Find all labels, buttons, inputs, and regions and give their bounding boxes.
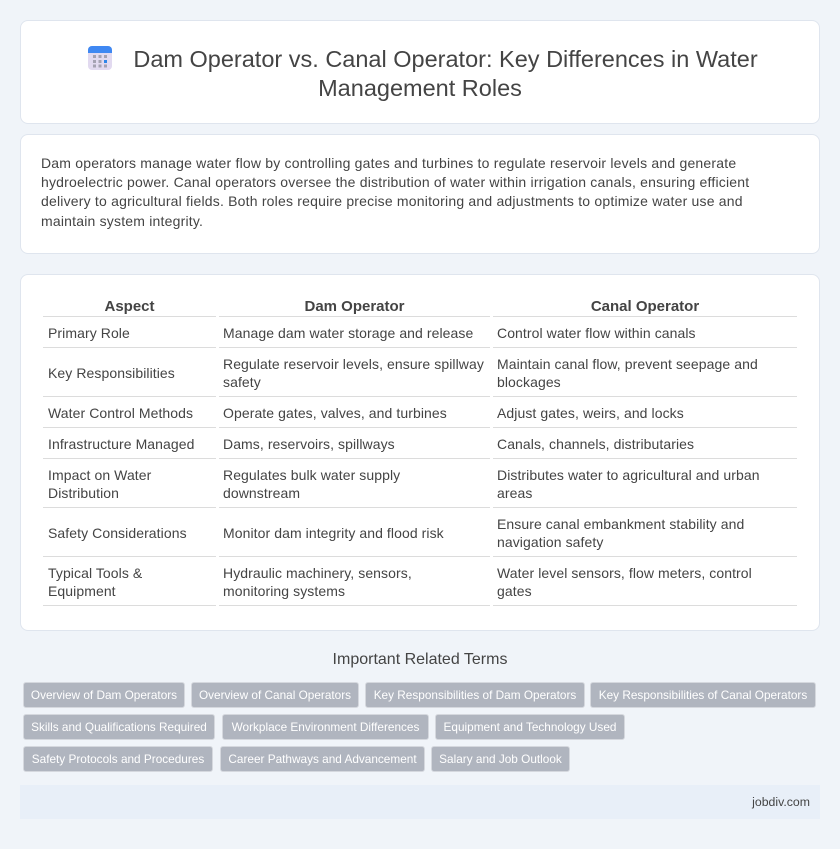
tag: [191, 682, 359, 708]
tag: Key Responsibilities of Canal Operators: [599, 688, 807, 702]
comparison table: Hydraulic machinery, sensors,: [223, 565, 412, 581]
comparison table: areas: [497, 485, 532, 501]
tag: Overview of Dam Operators: [31, 688, 177, 702]
summary text: hydroelectric power. Canal operators oversee the distribution of water within irrigation canals, ensuring efficient: [41, 174, 749, 190]
comparison table: Maintain canal flow, prevent seepage and: [497, 356, 758, 372]
tag: Equipment and Technology Used: [444, 720, 616, 734]
tag: Workplace Environment Differences: [232, 720, 419, 734]
footer: [20, 785, 820, 819]
comparison table: Primary Role: [48, 325, 130, 341]
comparison table: Aspect: [104, 298, 155, 315]
summary text: maintain system integrity.: [41, 213, 203, 229]
comparison table: Canal Operator: [591, 298, 699, 315]
summary text: [41, 155, 750, 229]
tag: Overview of Canal Operators: [199, 688, 351, 702]
comparison table: Distributes water to agricultural and urban: [497, 467, 760, 483]
tag: [431, 746, 570, 772]
tag: Key Responsibilities of Dam Operators: [374, 688, 576, 702]
comparison table: Dam Operator: [304, 298, 405, 315]
comparison table: Distribution: [48, 485, 119, 501]
comparison table: safety: [223, 374, 261, 390]
comparison table: Ensure canal embankment stability and: [497, 516, 744, 532]
comparison table: Water level sensors, flow meters, control: [497, 565, 752, 581]
title: [133, 46, 758, 101]
comparison table: navigation safety: [497, 534, 603, 550]
comparison table: Typical Tools &: [48, 565, 142, 581]
tag: [23, 682, 185, 708]
comparison table: Dams, reservoirs, spillways: [223, 436, 395, 452]
title: Management Roles: [318, 75, 522, 101]
panel: header: [20, 20, 820, 124]
panel: related term tags: [23, 682, 816, 772]
comparison table: gates: [497, 583, 532, 599]
comparison table: Monitor dam integrity and flood risk: [223, 525, 444, 541]
comparison table: Control water flow within canals: [497, 325, 696, 341]
comparison table: Equipment: [48, 583, 116, 599]
tag: [435, 714, 625, 740]
tag: Salary and Job Outlook: [439, 752, 562, 766]
tag: [365, 682, 585, 708]
tag: Safety Protocols and Procedures: [32, 752, 204, 766]
comparison table: blockages: [497, 374, 561, 390]
tag: [222, 714, 429, 740]
footer: jobdiv.com: [752, 795, 810, 809]
panel: comparison table: [20, 274, 820, 631]
comparison table: downstream: [223, 485, 300, 501]
tag: [23, 714, 215, 740]
heading: related terms: Important Related Terms: [333, 651, 507, 668]
tag: [220, 746, 425, 772]
panel: summary: [20, 134, 820, 254]
comparison table: Regulates bulk water supply: [223, 467, 400, 483]
summary text: Dam operators manage water flow by controlling gates and turbines to regulate reservoir levels and generate: [41, 155, 736, 171]
tag: Skills and Qualifications Required: [31, 720, 207, 734]
title: Dam Operator vs. Canal Operator: Key Differences in Water: [133, 46, 758, 72]
comparison table: Operate gates, valves, and turbines: [223, 405, 447, 421]
comparison table: Safety Considerations: [48, 525, 187, 541]
tag: [590, 682, 816, 708]
summary text: delivery to agricultural fields. Both roles require precise monitoring and adjustments to optimize water use and: [41, 193, 743, 209]
comparison table: Manage dam water storage and release: [223, 325, 473, 341]
comparison table: monitoring systems: [223, 583, 345, 599]
icon: calendar: [88, 46, 112, 70]
tag: Career Pathways and Advancement: [228, 752, 417, 766]
comparison table: Key Responsibilities: [48, 365, 175, 381]
comparison table: Infrastructure Managed: [48, 436, 195, 452]
comparison table: [43, 298, 797, 606]
comparison table: Regulate reservoir levels, ensure spillway: [223, 356, 484, 372]
comparison table: Canals, channels, distributaries: [497, 436, 694, 452]
comparison table: Water Control Methods: [48, 405, 193, 421]
tag: [23, 746, 213, 772]
comparison table: Impact on Water: [48, 467, 151, 483]
comparison table: Adjust gates, weirs, and locks: [497, 405, 684, 421]
